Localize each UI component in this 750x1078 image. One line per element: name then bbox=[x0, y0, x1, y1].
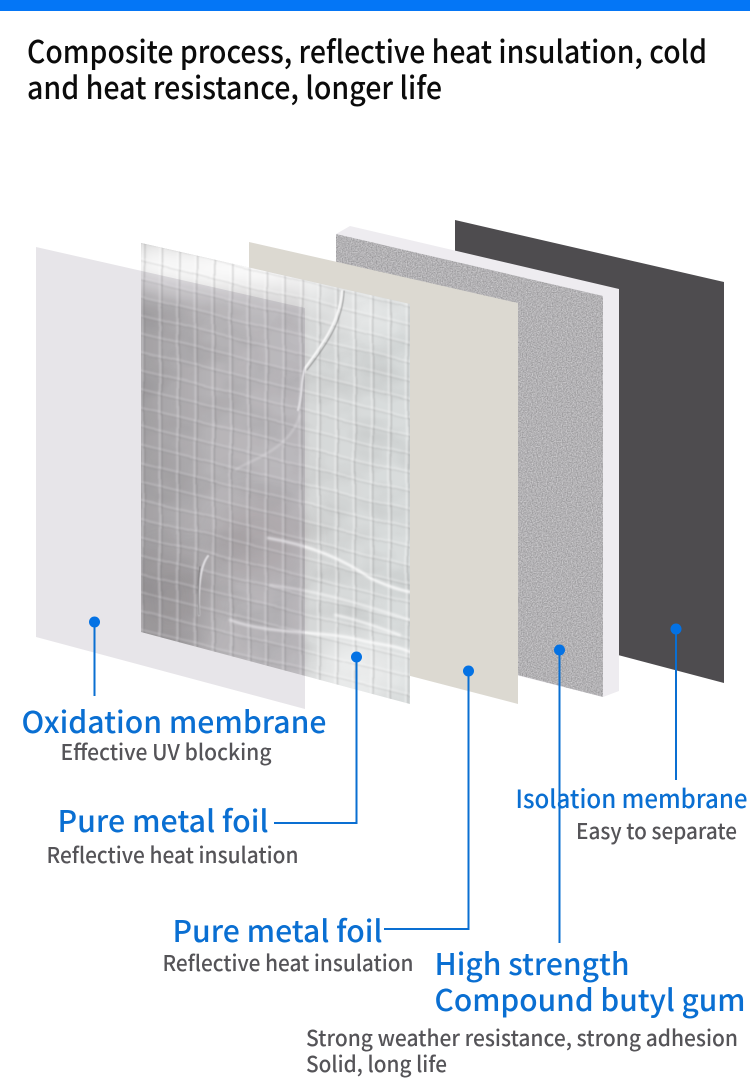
layer: isolation membrane (dark sheet) bbox=[455, 220, 724, 683]
label: high strength compound butyl gum: High strength bbox=[434, 940, 630, 984]
leader: beige layer bbox=[384, 666, 474, 929]
label: pure metal foil 1: Pure metal foil bbox=[58, 797, 268, 841]
label: pure metal foil 2: Pure metal foil bbox=[172, 907, 382, 951]
foil base bbox=[141, 243, 410, 704]
label: isolation membrane: Easy to separate bbox=[576, 814, 737, 846]
leader: butyl gum bbox=[554, 644, 565, 943]
foil mesh bbox=[141, 244, 410, 704]
top blue bar bbox=[0, 0, 750, 11]
title: and heat resistance, longer life bbox=[27, 63, 442, 108]
label: high strength compound butyl gum: Compound butyl gum bbox=[434, 976, 746, 1020]
label: high strength compound butyl gum: Strong weather resistance, strong adhesion bbox=[306, 1021, 738, 1053]
label: oxidation membrane: Effective UV blocking bbox=[60, 735, 272, 767]
title bbox=[27, 27, 707, 108]
foil light and shade patches bbox=[141, 243, 404, 698]
label: isolation membrane bbox=[516, 780, 748, 846]
label: oxidation membrane: Oxidation membrane bbox=[22, 698, 326, 742]
leader: oxidation membrane bbox=[89, 616, 100, 696]
label: pure metal foil 1 bbox=[46, 797, 298, 870]
label: oxidation membrane bbox=[22, 698, 326, 767]
leader: isolation membrane bbox=[670, 624, 682, 780]
layer: pure metal foil bbox=[141, 243, 410, 704]
board white edge bbox=[336, 226, 619, 697]
title: Composite process, reflective heat insulation, cold bbox=[27, 27, 707, 72]
label: pure metal foil 1: Reflective heat insulation bbox=[46, 838, 298, 870]
label: pure metal foil 2: Reflective heat insulation bbox=[162, 946, 414, 978]
foil wrinkles bbox=[198, 291, 344, 615]
layer: compound butyl gum board bbox=[336, 226, 619, 697]
label: isolation membrane: Isolation membrane bbox=[516, 780, 748, 816]
board grey grain face bbox=[336, 234, 603, 697]
label: high strength compound butyl gum bbox=[306, 940, 746, 1078]
label: pure metal foil 2 bbox=[162, 907, 414, 978]
layer: oxidation membrane bbox=[36, 247, 305, 709]
foil mottling bbox=[170, 301, 410, 650]
leader: pure metal foil bbox=[274, 652, 362, 823]
layer: beige adhesive sheet bbox=[249, 242, 518, 704]
